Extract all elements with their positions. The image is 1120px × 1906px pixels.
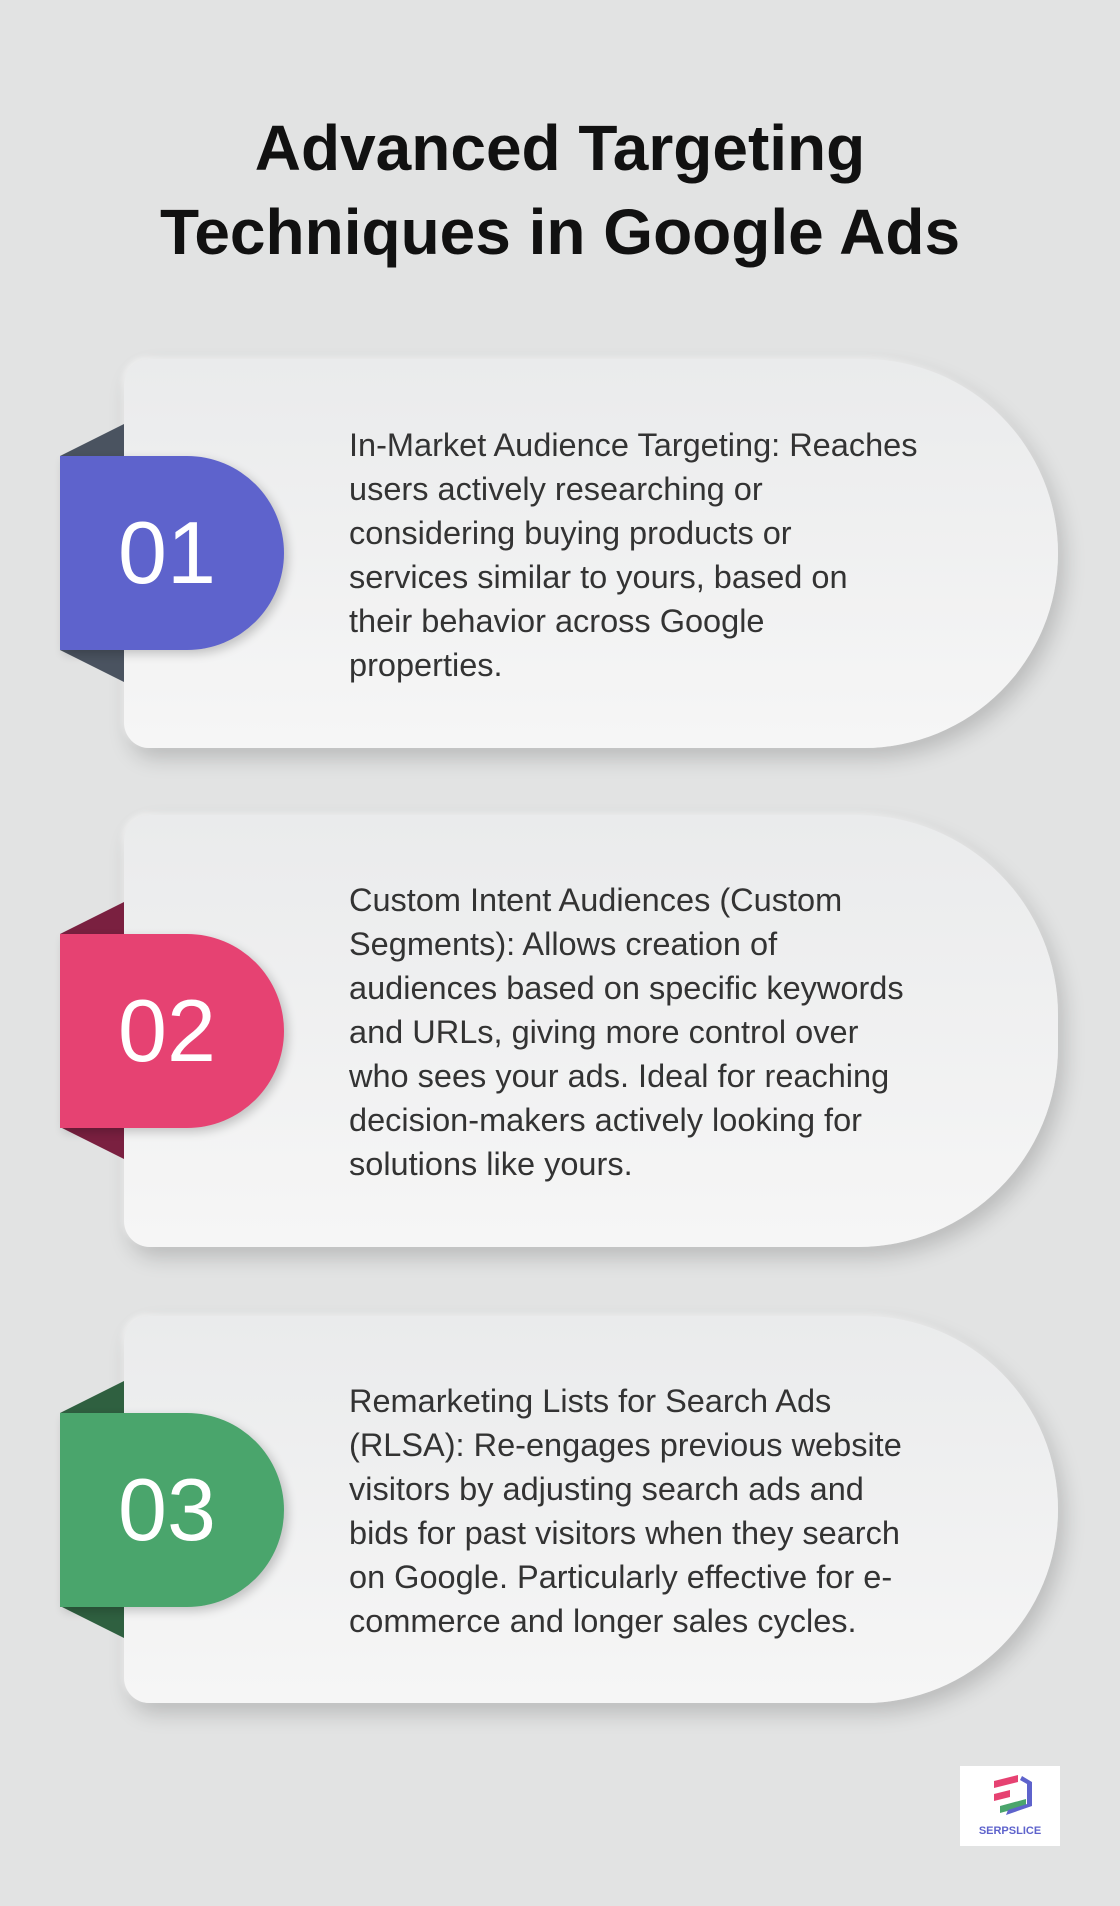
- title: Techniques in Google Ads: [160, 196, 960, 268]
- text 1: properties.: [349, 647, 503, 683]
- text 2: audiences based on specific keywords: [349, 970, 904, 1006]
- text 2: solutions like yours.: [349, 1146, 633, 1182]
- text 3: Remarketing Lists for Search Ads: [349, 1383, 831, 1419]
- text 3: on Google. Particularly effective for e-: [349, 1559, 892, 1595]
- text 2: Custom Intent Audiences (Custom: [349, 882, 842, 918]
- text 3: [349, 1383, 902, 1639]
- text 1: their behavior across Google: [349, 603, 765, 639]
- fold top 1: [60, 424, 124, 456]
- badge 03: [60, 1413, 284, 1607]
- title: Advanced Targeting: [255, 112, 865, 184]
- badge 02: 02: [118, 981, 216, 1080]
- text 1: In-Market Audience Targeting: Reaches: [349, 427, 917, 463]
- text 2: [349, 882, 904, 1182]
- badge 01: 01: [118, 503, 216, 602]
- badge 03: 03: [118, 1460, 216, 1559]
- text 2: Segments): Allows creation of: [349, 926, 777, 962]
- text 1: services similar to yours, based on: [349, 559, 848, 595]
- text 3: (RLSA): Re-engages previous website: [349, 1427, 902, 1463]
- text 3: commerce and longer sales cycles.: [349, 1603, 857, 1639]
- text 3: bids for past visitors when they search: [349, 1515, 900, 1551]
- logo: [960, 1766, 1060, 1846]
- text 3: visitors by adjusting search ads and: [349, 1471, 864, 1507]
- text 2: decision-makers actively looking for: [349, 1102, 862, 1138]
- fold top 2: [60, 902, 124, 934]
- title: [160, 112, 960, 268]
- panel: card 1: [124, 359, 1058, 748]
- panel: card 2: [124, 815, 1058, 1247]
- logo: SERPSLICE: [979, 1825, 1041, 1837]
- text 2: who sees your ads. Ideal for reaching: [349, 1058, 889, 1094]
- fold top 3: [60, 1381, 124, 1413]
- fold bottom 2: [62, 1128, 124, 1159]
- text 1: considering buying products or: [349, 515, 792, 551]
- text 1: users actively researching or: [349, 471, 763, 507]
- badge 01: [60, 456, 284, 650]
- text 2: and URLs, giving more control over: [349, 1014, 858, 1050]
- panel: card 3: [124, 1316, 1058, 1703]
- badge 02: [60, 934, 284, 1128]
- text 1: [349, 427, 917, 683]
- fold bottom 3: [62, 1607, 124, 1638]
- fold bottom 1: [60, 650, 124, 682]
